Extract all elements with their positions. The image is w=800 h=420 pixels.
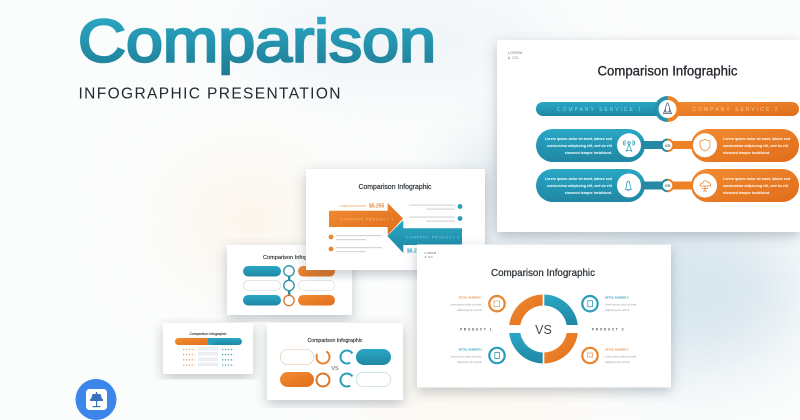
detail text: DETAIL NUMBER 4 xyxy=(605,348,629,352)
detail text: DETAIL NUMBER 2 xyxy=(605,296,629,300)
icon rings xyxy=(489,296,598,363)
left bullets xyxy=(329,235,382,252)
row 1: teal pill xyxy=(536,129,668,162)
product labels: PRODUCT 2 xyxy=(592,328,625,332)
panel: slide progress rings: VS xyxy=(331,366,339,372)
vs badge 2: VS xyxy=(665,183,670,188)
product labels: PRODUCT 1 xyxy=(460,328,493,332)
slide heading: Comparison Infographic xyxy=(491,268,595,279)
row 2: teal pill: Lorem ipsum dolor sit amet, labore sed xyxy=(545,177,612,181)
vs badge 2 xyxy=(661,179,674,192)
panel: slide table with service pills: Comparison Infographic xyxy=(263,255,323,261)
vs badge 1: VS xyxy=(665,143,670,148)
row 1: orange pill: Lorem ipsum dolor sit amet, labore sed xyxy=(723,137,790,141)
arrow labels: COMPANY PRODUCT 1 xyxy=(340,218,394,222)
panel: slide table with service pills xyxy=(227,245,352,315)
icon glyphs xyxy=(494,301,592,358)
right bullets xyxy=(409,204,462,222)
panel: slide arrows xyxy=(306,169,485,270)
detail text: Lorem ipsum dolor sit amet, xyxy=(605,354,637,358)
row 2: teal pill: consectetur adipiscing elit, sed do elit xyxy=(547,184,613,188)
orange arrow xyxy=(329,203,403,235)
detail text: DETAIL NUMBER 3 xyxy=(459,348,483,352)
detail text: adipiscing elit, sed do xyxy=(457,308,483,312)
vs badge 1 xyxy=(661,138,674,152)
row 2: teal pill xyxy=(536,169,668,202)
row 2: orange pill: consectetur adipiscing elit, sed do elit xyxy=(723,184,789,188)
logo: & CO. xyxy=(508,56,520,60)
teal arrow xyxy=(387,220,462,253)
detail text xyxy=(450,296,637,364)
product labels xyxy=(460,328,625,332)
slide heading: Comparison Infographic xyxy=(358,182,432,191)
icon: antenna xyxy=(624,140,634,152)
subtitle: INFOGRAPHIC PRESENTATION xyxy=(78,86,340,102)
donut chart xyxy=(509,294,578,364)
icon: cloud xyxy=(700,181,711,191)
title: Comparison xyxy=(78,8,436,74)
detail text: adipiscing elit, sed do xyxy=(605,360,630,364)
detail text: adipiscing elit, sed do xyxy=(605,308,630,312)
panel: slide star ratings: Comparison Infographic xyxy=(190,331,227,336)
detail text: Lorem ipsum dolor sit amet, xyxy=(450,302,482,306)
row 2: teal pill: eiusmod tempor incididunt. xyxy=(565,191,612,195)
arrow labels: $5.255 xyxy=(407,248,423,254)
vs label: VS xyxy=(535,323,552,337)
row 2: orange pill xyxy=(667,169,799,202)
row 1: orange pill xyxy=(667,129,799,162)
logo: LOREM xyxy=(424,251,436,255)
icon: keynote badge xyxy=(76,379,116,420)
row 1: teal pill: consectetur adipiscing elit, sed do elit xyxy=(547,144,613,148)
arrow labels: $5.255 xyxy=(369,204,385,210)
detail text: DETAIL NUMBER 1 xyxy=(459,296,483,300)
logo: & CO. xyxy=(424,255,434,259)
row 2: orange pill: eiusmod tempor incididunt. xyxy=(723,191,770,195)
panel: slide star ratings xyxy=(163,323,253,374)
panel: slide donut vs xyxy=(417,244,671,388)
arrow labels xyxy=(340,204,460,254)
panel: slide progress rings: Comparison Infographic xyxy=(308,338,363,344)
icon: shield xyxy=(700,140,710,151)
detail text: Lorem ipsum dolor sit amet, xyxy=(450,354,482,358)
header bar: COMPANY SERVICE 1 xyxy=(557,107,641,113)
icon: bell xyxy=(626,181,631,190)
row 1: orange pill: consectetur adipiscing elit, sed do elit xyxy=(723,144,789,148)
arrow labels: LOREM IPSUM DOLOR xyxy=(340,205,366,208)
detail text: adipiscing elit, sed do xyxy=(457,360,483,364)
icon: rocket xyxy=(664,103,672,114)
arrow labels: COMPANY PRODUCT 2 xyxy=(406,236,460,240)
row 1: teal pill: eiusmod tempor incididunt. xyxy=(565,151,612,155)
row 1: teal pill: Lorem ipsum dolor sit amet, labore sed xyxy=(545,137,612,141)
slide heading: Comparison Infographic xyxy=(598,64,738,78)
detail text: Lorem ipsum dolor sit amet, xyxy=(605,302,637,306)
row 2: orange pill: Lorem ipsum dolor sit amet, labore sed xyxy=(723,177,790,181)
logo: LOREM xyxy=(508,51,523,55)
row 1: orange pill: eiusmod tempor incididunt. xyxy=(723,151,770,155)
header bar xyxy=(536,96,799,122)
panel: main slide services xyxy=(497,40,800,232)
header bar: COMPANY SERVICE 2 xyxy=(692,107,778,113)
panel: slide progress rings xyxy=(267,323,403,400)
